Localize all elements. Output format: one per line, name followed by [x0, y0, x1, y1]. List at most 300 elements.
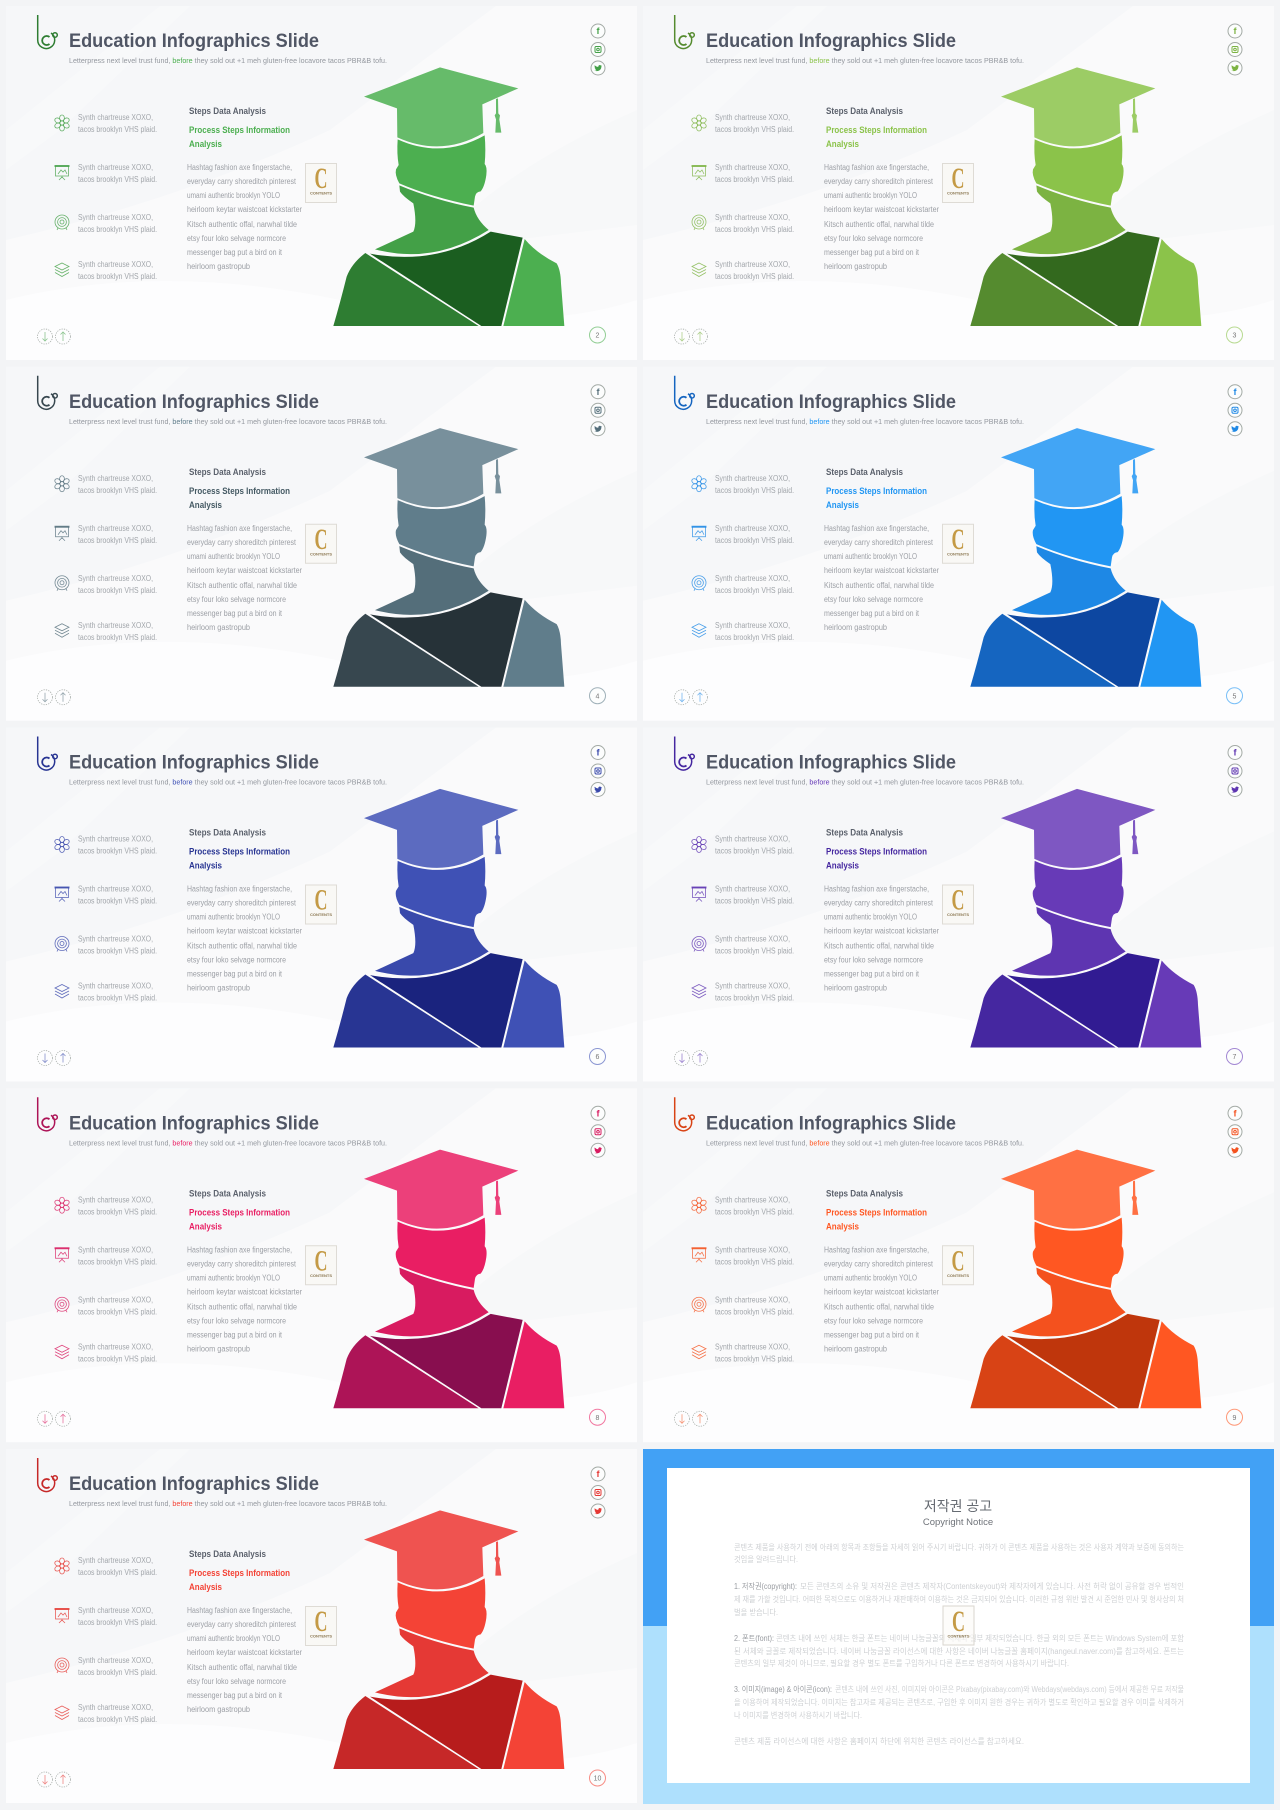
text block: everyday carry shoreditch pinterest: [187, 898, 297, 908]
contents badge: CONTENTS: [947, 190, 969, 196]
navigation arrows: [674, 690, 708, 705]
text block: [187, 467, 302, 632]
slide 6: indigo: [6, 728, 637, 1082]
feature list: tacos brooklyn VHS plaid.: [78, 846, 157, 856]
graduate figure: [333, 428, 564, 687]
slide 5: blue: [643, 367, 1274, 721]
text block: Kitsch authentic offal, narwhal tilde: [187, 1302, 297, 1311]
text block: umami authentic brooklyn YOLO: [187, 1634, 280, 1643]
text block: Process Steps Information: [189, 1207, 290, 1218]
text block: everyday carry shoreditch pinterest: [187, 177, 297, 186]
text block: Steps Data Analysis: [189, 1549, 266, 1559]
feature list: tacos brooklyn VHS plaid.: [78, 1207, 157, 1216]
text block: everyday carry shoreditch pinterest: [187, 1620, 297, 1629]
feature list: tacos brooklyn VHS plaid.: [78, 536, 157, 545]
contents badge: [942, 523, 974, 563]
feature list: [691, 834, 794, 1002]
social icons: f: [1234, 1108, 1238, 1118]
title: Education Infographics Slide: [69, 752, 319, 774]
feature list: tacos brooklyn VHS plaid.: [78, 946, 157, 956]
text block: [187, 106, 302, 271]
feature list: Synth chartreuse XOXO,: [78, 574, 153, 583]
text block: Analysis: [189, 1221, 222, 1232]
text block: Steps Data Analysis: [826, 467, 903, 477]
text block: Hashtag fashion axe fingerstache,: [187, 884, 292, 894]
text block: everyday carry shoreditch pinterest: [187, 538, 297, 547]
text block: Kitsch authentic offal, narwhal tilde: [824, 581, 934, 590]
title: Education Infographics Slide: [706, 31, 956, 52]
feature list: Synth chartreuse XOXO,: [78, 1195, 153, 1204]
text block: Steps Data Analysis: [826, 106, 903, 116]
notice body text: 콘텐츠 내에 쓰인 사진, 이미지와 아이콘은 Pixabay(pixabay.com)와 Webdays(webdays.com) 등에서 제공한 무료 저작물: [835, 1684, 1184, 1694]
text block: etsy four loko selvage normcore: [187, 595, 286, 604]
text block: Hashtag fashion axe fingerstache,: [187, 163, 292, 172]
text block: Steps Data Analysis: [826, 828, 903, 838]
feature list: Synth chartreuse XOXO,: [715, 474, 790, 483]
feature list: tacos brooklyn VHS plaid.: [715, 846, 794, 856]
contents badge: [306, 1605, 336, 1646]
feature list: tacos brooklyn VHS plaid.: [715, 994, 794, 1002]
feature list: Synth chartreuse XOXO,: [78, 1245, 153, 1254]
text block: heirloom keytar waistcoat kickstarter: [187, 926, 302, 936]
feature list: Synth chartreuse XOXO,: [715, 1195, 790, 1204]
white notice panel: [667, 1468, 1250, 1783]
graduate figure: [333, 67, 564, 326]
page number: [590, 327, 606, 343]
page number: [590, 688, 606, 704]
contents badge: CONTENTS: [310, 551, 332, 556]
text block: heirloom keytar waistcoat kickstarter: [187, 566, 302, 575]
notice body text: 콘텐츠 제품 라이선스에 대한 사항은 홈페이지 하단에 위치한 콘텐츠 라이선스를 참고하세요.: [734, 1736, 1024, 1746]
text block: umami authentic brooklyn YOLO: [824, 1273, 917, 1282]
text block: messenger bag put a bird on it: [824, 248, 920, 257]
social icons: [1228, 1106, 1242, 1157]
feature list: [54, 113, 157, 281]
text block: heirloom gastropub: [187, 623, 251, 632]
text block: umami authentic brooklyn YOLO: [824, 552, 917, 561]
slide 2: green: [6, 6, 637, 360]
page number: 4: [596, 693, 600, 700]
feature list: tacos brooklyn VHS plaid.: [715, 1257, 794, 1266]
feature list: tacos brooklyn VHS plaid.: [78, 994, 157, 1002]
feature list: Synth chartreuse XOXO,: [715, 884, 790, 894]
feature list: tacos brooklyn VHS plaid.: [78, 896, 157, 906]
feature list: Synth chartreuse XOXO,: [78, 884, 153, 894]
feature list: tacos brooklyn VHS plaid.: [715, 896, 794, 906]
page number: [1226, 327, 1242, 343]
notice body text: [734, 1542, 1185, 1746]
notice body text: 것임을 알려드립니다.: [734, 1554, 798, 1564]
text block: Process Steps Information: [826, 1207, 927, 1218]
text block: [824, 106, 939, 271]
feature list: Synth chartreuse XOXO,: [78, 1295, 153, 1304]
feature list: tacos brooklyn VHS plaid.: [715, 536, 794, 545]
feature list: Synth chartreuse XOXO,: [715, 260, 790, 269]
subtitle: Letterpress next level trust fund, before they sold out +1 meh gluten-free locavore tacos PBR&B tofu.: [69, 1138, 387, 1147]
text block: heirloom gastropub: [187, 1705, 251, 1714]
page number: 8: [596, 1415, 600, 1422]
feature list: Synth chartreuse XOXO,: [715, 621, 790, 630]
text block: [824, 467, 939, 632]
text block: umami authentic brooklyn YOLO: [187, 1273, 280, 1282]
text block: messenger bag put a bird on it: [187, 609, 283, 618]
text block: Process Steps Information: [826, 125, 927, 136]
text block: Hashtag fashion axe fingerstache,: [187, 1245, 292, 1254]
text block: messenger bag put a bird on it: [187, 1330, 283, 1339]
text block: messenger bag put a bird on it: [824, 970, 920, 978]
social icons: [1228, 746, 1242, 796]
text block: Hashtag fashion axe fingerstache,: [187, 1606, 292, 1615]
contents badge: [306, 884, 336, 924]
page number: 10: [594, 1776, 601, 1782]
feature list: Synth chartreuse XOXO,: [715, 834, 790, 844]
text block: heirloom keytar waistcoat kickstarter: [824, 205, 939, 214]
notice body text: 3. 이미지(image) & 아이콘(icon):: [734, 1684, 832, 1694]
feature list: Synth chartreuse XOXO,: [715, 574, 790, 583]
text block: Kitsch authentic offal, narwhal tilde: [187, 942, 297, 950]
text block: Kitsch authentic offal, narwhal tilde: [187, 1663, 297, 1672]
feature list: tacos brooklyn VHS plaid.: [78, 1568, 157, 1577]
feature list: tacos brooklyn VHS plaid.: [78, 1354, 157, 1363]
feature list: Synth chartreuse XOXO,: [78, 213, 153, 222]
feature list: Synth chartreuse XOXO,: [715, 934, 790, 944]
feature list: Synth chartreuse XOXO,: [78, 260, 153, 269]
social icons: [1228, 24, 1242, 75]
text block: [824, 828, 939, 992]
feature list: tacos brooklyn VHS plaid.: [78, 225, 157, 234]
text block: umami authentic brooklyn YOLO: [187, 912, 280, 922]
text block: everyday carry shoreditch pinterest: [824, 898, 934, 908]
text block: Process Steps Information: [826, 486, 927, 497]
feature list: [691, 474, 794, 642]
notice heading: 저작권 공고: [924, 1498, 992, 1514]
text block: messenger bag put a bird on it: [187, 1691, 283, 1700]
contents badge: [306, 1244, 336, 1285]
feature list: tacos brooklyn VHS plaid.: [715, 586, 794, 595]
feature list: [54, 1195, 157, 1363]
contents badge: CONTENTS: [948, 1634, 970, 1638]
contents badge: CONTENTS: [310, 1634, 332, 1638]
contents badge: C: [314, 1244, 328, 1277]
graduate figure: [970, 67, 1201, 326]
graduate figure: [333, 789, 564, 1047]
feature list: tacos brooklyn VHS plaid.: [715, 633, 794, 642]
contents badge: [942, 162, 974, 202]
text block: Hashtag fashion axe fingerstache,: [187, 524, 292, 533]
feature list: Synth chartreuse XOXO,: [78, 474, 153, 483]
text block: Process Steps Information: [189, 125, 290, 136]
text block: messenger bag put a bird on it: [187, 248, 283, 257]
text block: etsy four loko selvage normcore: [824, 595, 923, 604]
social icons: [591, 385, 605, 436]
feature list: [54, 1556, 157, 1724]
contents badge: [306, 523, 336, 563]
social icons: [591, 746, 605, 796]
social icons: [1228, 385, 1242, 436]
page number: 5: [1233, 693, 1237, 700]
text block: etsy four loko selvage normcore: [187, 1316, 286, 1325]
feature list: Synth chartreuse XOXO,: [78, 934, 153, 944]
feature list: tacos brooklyn VHS plaid.: [715, 1207, 794, 1216]
contents badge: C: [952, 1244, 964, 1277]
text block: Steps Data Analysis: [189, 1188, 266, 1198]
feature list: tacos brooklyn VHS plaid.: [715, 225, 794, 234]
text block: everyday carry shoreditch pinterest: [187, 1259, 297, 1268]
text block: Hashtag fashion axe fingerstache,: [824, 884, 929, 894]
graduate figure: [333, 1150, 564, 1408]
page number: 2: [596, 332, 600, 340]
feature list: [54, 474, 157, 642]
subtitle: Letterpress next level trust fund, before they sold out +1 meh gluten-free locavore tacos PBR&B tofu.: [706, 56, 1024, 65]
navigation arrows: [38, 690, 70, 705]
social icons: f: [596, 748, 600, 758]
feature list: tacos brooklyn VHS plaid.: [78, 486, 157, 495]
page number: 9: [1233, 1415, 1237, 1422]
text block: heirloom gastropub: [824, 262, 888, 271]
page number: 3: [1233, 332, 1237, 340]
contents badge: C: [952, 162, 964, 195]
title: Education Infographics Slide: [706, 752, 956, 774]
contents badge: [306, 162, 336, 202]
graduate figure: [970, 428, 1201, 687]
text block: umami authentic brooklyn YOLO: [187, 552, 280, 561]
text block: Hashtag fashion axe fingerstache,: [824, 524, 929, 533]
feature list: [691, 113, 794, 281]
text block: etsy four loko selvage normcore: [187, 956, 286, 964]
page number: [1226, 688, 1242, 704]
slide 10: red: [6, 1449, 637, 1803]
feature list: tacos brooklyn VHS plaid.: [78, 272, 157, 281]
text block: Steps Data Analysis: [189, 467, 266, 477]
social icons: f: [596, 1108, 600, 1118]
navigation arrows: [674, 1411, 708, 1426]
text block: heirloom gastropub: [187, 262, 251, 271]
text block: Analysis: [189, 139, 222, 150]
text block: Process Steps Information: [189, 486, 290, 497]
text block: everyday carry shoreditch pinterest: [824, 177, 934, 186]
contents badge: CONTENTS: [310, 1273, 332, 1278]
feature list: tacos brooklyn VHS plaid.: [715, 486, 794, 495]
navigation arrows: [674, 329, 708, 344]
social icons: f: [596, 26, 600, 36]
contents badge: CONTENTS: [310, 190, 332, 196]
graduate figure: [970, 789, 1201, 1047]
page number: [590, 1409, 606, 1425]
text block: Steps Data Analysis: [189, 106, 266, 116]
text block: Kitsch authentic offal, narwhal tilde: [824, 1302, 934, 1311]
text block: etsy four loko selvage normcore: [824, 956, 923, 964]
text block: Kitsch authentic offal, narwhal tilde: [824, 942, 934, 950]
title: Education Infographics Slide: [69, 1474, 319, 1495]
subtitle: Letterpress next level trust fund, before they sold out +1 meh gluten-free locavore tacos PBR&B tofu.: [69, 56, 387, 65]
feature list: tacos brooklyn VHS plaid.: [78, 1668, 157, 1677]
notice body text: 콘텐츠 제품을 사용하기 전에 아래의 항목과 조항들을 자세히 읽어 주시기 바랍니다. 귀하가 이 콘텐츠 제품을 사용하는 것은 사용자 계약과 보증에 동의하는: [734, 1542, 1184, 1552]
text block: etsy four loko selvage normcore: [187, 234, 286, 243]
text block: messenger bag put a bird on it: [824, 609, 920, 618]
navigation arrows: [38, 1050, 70, 1066]
contents badge: C: [314, 162, 328, 195]
feature list: Synth chartreuse XOXO,: [78, 1556, 153, 1565]
feature list: Synth chartreuse XOXO,: [78, 1656, 153, 1665]
subtitle: Letterpress next level trust fund, before they sold out +1 meh gluten-free locavore tacos PBR&B tofu.: [69, 417, 387, 426]
notice subheading: Copyright Notice: [923, 1517, 993, 1528]
navigation arrows: [38, 1411, 70, 1426]
feature list: tacos brooklyn VHS plaid.: [78, 175, 157, 184]
text block: Kitsch authentic offal, narwhal tilde: [824, 220, 934, 229]
feature list: Synth chartreuse XOXO,: [78, 621, 153, 630]
feature list: tacos brooklyn VHS plaid.: [715, 1354, 794, 1363]
feature list: tacos brooklyn VHS plaid.: [715, 175, 794, 184]
text block: Process Steps Information: [189, 846, 290, 858]
slide 8: pink: [6, 1088, 637, 1442]
feature list: Synth chartreuse XOXO,: [78, 1342, 153, 1351]
text block: [187, 1188, 302, 1353]
text block: Analysis: [189, 500, 222, 511]
social icons: f: [1234, 26, 1238, 36]
feature list: tacos brooklyn VHS plaid.: [78, 1257, 157, 1266]
text block: heirloom gastropub: [187, 984, 251, 992]
social icons: f: [1234, 387, 1238, 397]
text block: umami authentic brooklyn YOLO: [824, 912, 917, 922]
feature list: Synth chartreuse XOXO,: [715, 163, 790, 172]
notice body text: 벌을 받습니다.: [734, 1607, 778, 1617]
notice body text: 콘텐츠 내에 쓰인 서체는 한글 폰트는 네이버 나눔글꼴의 서체와 일부 제작되었습니다. 한글 외의 모든 폰트는 Windows System에 포함: [776, 1633, 1185, 1643]
notice body text: 2. 폰트(font):: [734, 1634, 774, 1643]
contents badge: CONTENTS: [947, 551, 969, 556]
text block: everyday carry shoreditch pinterest: [824, 1259, 934, 1268]
feature list: tacos brooklyn VHS plaid.: [78, 1307, 157, 1316]
feature list: Synth chartreuse XOXO,: [715, 982, 790, 990]
text block: heirloom keytar waistcoat kickstarter: [824, 1287, 939, 1296]
page number: 7: [1233, 1054, 1237, 1061]
feature list: tacos brooklyn VHS plaid.: [78, 1715, 157, 1724]
graduate figure: [333, 1510, 564, 1769]
feature list: Synth chartreuse XOXO,: [715, 1295, 790, 1304]
feature list: tacos brooklyn VHS plaid.: [78, 125, 157, 134]
text block: [187, 1549, 302, 1714]
text block: heirloom gastropub: [187, 1344, 251, 1353]
contents badge: C: [952, 523, 964, 556]
notice body text: 을 이용하여 제작되었습니다. 이미지는 참고자료 제공되는 콘텐츠로, 구입한 후 이미지 원한 경우는 귀하가 별도로 확인하고 필요할 경우 이미를 삭제하거: [734, 1697, 1184, 1707]
slide 7: deep purple: [643, 728, 1274, 1082]
text block: Hashtag fashion axe fingerstache,: [824, 163, 929, 172]
text block: Analysis: [826, 139, 859, 150]
feature list: tacos brooklyn VHS plaid.: [715, 946, 794, 956]
contents badge: C: [314, 1605, 328, 1638]
feature list: [54, 834, 157, 1002]
text block: Analysis: [189, 860, 222, 872]
feature list: Synth chartreuse XOXO,: [715, 213, 790, 222]
contents badge: CONTENTS: [310, 912, 332, 917]
feature list: Synth chartreuse XOXO,: [715, 1245, 790, 1254]
subtitle: Letterpress next level trust fund, before they sold out +1 meh gluten-free locavore tacos PBR&B tofu.: [706, 1138, 1024, 1147]
feature list: tacos brooklyn VHS plaid.: [715, 1307, 794, 1316]
text block: heirloom keytar waistcoat kickstarter: [824, 566, 939, 575]
notice body text: 나 이미지를 변경하여 사용하시기 바랍니다.: [734, 1710, 862, 1720]
page number: [1226, 1048, 1242, 1064]
text block: Analysis: [826, 860, 859, 872]
text block: [824, 1188, 939, 1353]
text block: heirloom gastropub: [824, 1344, 888, 1353]
text block: Steps Data Analysis: [826, 1188, 903, 1198]
social icons: f: [596, 1469, 600, 1479]
text block: messenger bag put a bird on it: [187, 970, 283, 978]
text block: Analysis: [826, 500, 859, 511]
text block: Hashtag fashion axe fingerstache,: [824, 1245, 929, 1254]
notice body text: 모든 콘텐츠의 소유 및 저작권은 콘텐츠 제작자(Contentskeyout)와 제작자에게 있습니다. 사전 허락 없이 공유할 경우 법적인: [800, 1581, 1184, 1591]
slide 3: light green: [643, 6, 1274, 360]
text block: Process Steps Information: [189, 1568, 290, 1579]
text block: etsy four loko selvage normcore: [824, 234, 923, 243]
contents badge: [943, 1605, 974, 1645]
text block: umami authentic brooklyn YOLO: [824, 191, 917, 200]
social icons: [591, 1467, 605, 1518]
feature list: tacos brooklyn VHS plaid.: [78, 633, 157, 642]
page number: [590, 1048, 606, 1064]
graduate figure: [970, 1150, 1201, 1408]
subtitle: Letterpress next level trust fund, before they sold out +1 meh gluten-free locavore tacos PBR&B tofu.: [69, 1499, 387, 1508]
feature list: Synth chartreuse XOXO,: [78, 113, 153, 122]
text block: Process Steps Information: [826, 846, 927, 858]
contents badge: CONTENTS: [947, 912, 969, 917]
contents badge: CONTENTS: [947, 1273, 969, 1278]
text block: etsy four loko selvage normcore: [824, 1316, 923, 1325]
text block: etsy four loko selvage normcore: [187, 1677, 286, 1686]
feature list: Synth chartreuse XOXO,: [78, 834, 153, 844]
text block: messenger bag put a bird on it: [824, 1330, 920, 1339]
title: Education Infographics Slide: [69, 392, 319, 413]
contents badge: [942, 884, 974, 924]
feature list: Synth chartreuse XOXO,: [78, 1606, 153, 1615]
feature list: Synth chartreuse XOXO,: [715, 1342, 790, 1351]
feature list: Synth chartreuse XOXO,: [715, 524, 790, 533]
contents badge: C: [314, 523, 328, 556]
feature list: tacos brooklyn VHS plaid.: [715, 272, 794, 281]
feature list: Synth chartreuse XOXO,: [78, 1703, 153, 1712]
text block: heirloom keytar waistcoat kickstarter: [187, 1287, 302, 1296]
feature list: [691, 1195, 794, 1363]
text block: Steps Data Analysis: [189, 828, 266, 838]
contents badge: C: [952, 884, 964, 916]
feature list: tacos brooklyn VHS plaid.: [78, 1618, 157, 1627]
text block: Kitsch authentic offal, narwhal tilde: [187, 220, 297, 229]
subtitle: Letterpress next level trust fund, before they sold out +1 meh gluten-free locavore tacos PBR&B tofu.: [706, 417, 1024, 426]
text block: heirloom gastropub: [824, 623, 888, 632]
text block: everyday carry shoreditch pinterest: [824, 538, 934, 547]
text block: heirloom keytar waistcoat kickstarter: [187, 205, 302, 214]
navigation arrows: [674, 1050, 708, 1066]
feature list: tacos brooklyn VHS plaid.: [715, 125, 794, 134]
contents badge: C: [314, 884, 328, 916]
social icons: [591, 24, 605, 75]
notice body text: 콘텐츠의 일부 제것이 아니므로, 필요할 경우 별도 폰트를 구입하거나 다른 폰트로 변경하여 사용하시기 바랍니다.: [734, 1658, 1069, 1668]
text block: heirloom keytar waistcoat kickstarter: [187, 1648, 302, 1657]
contents badge: [942, 1244, 974, 1285]
feature list: Synth chartreuse XOXO,: [78, 163, 153, 172]
subtitle: Letterpress next level trust fund, before they sold out +1 meh gluten-free locavore tacos PBR&B tofu.: [706, 778, 1024, 786]
text block: Analysis: [826, 1221, 859, 1232]
copyright notice slide: [643, 1449, 1274, 1804]
text block: umami authentic brooklyn YOLO: [187, 191, 280, 200]
feature list: Synth chartreuse XOXO,: [78, 524, 153, 533]
social icons: f: [1234, 748, 1238, 758]
text block: heirloom keytar waistcoat kickstarter: [824, 926, 939, 936]
feature list: Synth chartreuse XOXO,: [715, 113, 790, 122]
navigation arrows: [38, 1772, 70, 1787]
slide 9: deep orange: [643, 1088, 1274, 1442]
text block: [187, 828, 302, 992]
title: Education Infographics Slide: [69, 31, 319, 52]
